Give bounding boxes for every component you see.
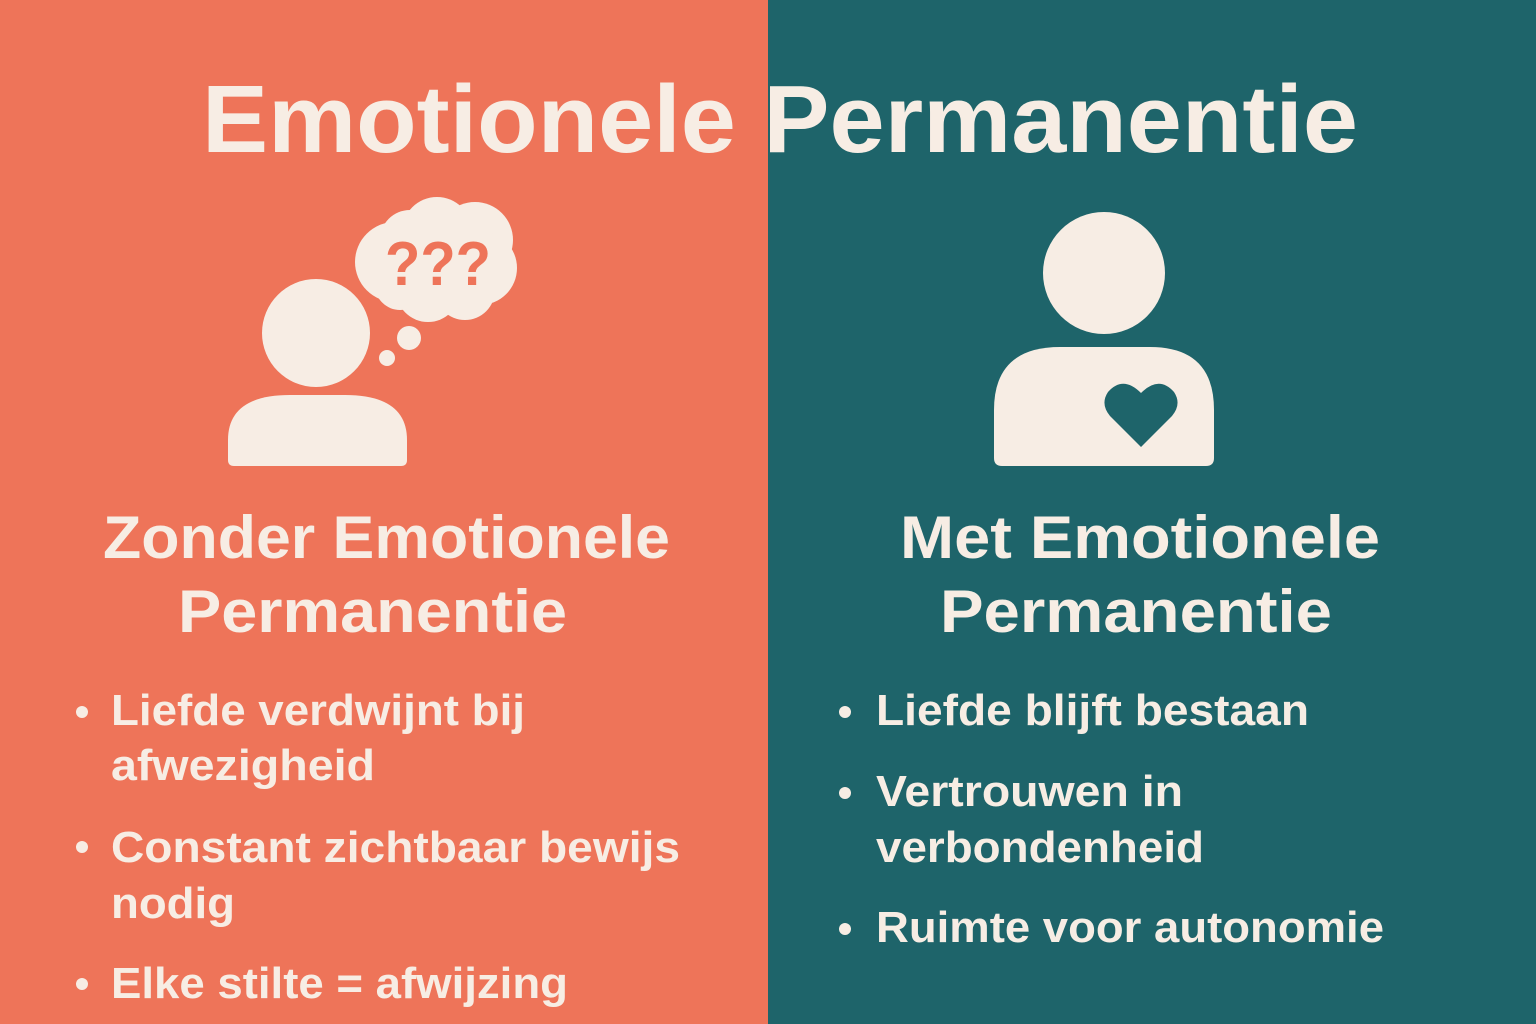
bullet list: left: nodig (111, 879, 235, 928)
panel: right background (768, 0, 1536, 1024)
bullet list: right: Ruimte voor autonomie (876, 903, 1384, 952)
bullet list: right: Vertrouwen in (876, 767, 1183, 816)
title: Emotionele Permanentie (202, 66, 1358, 173)
heading: left: Zonder Emotionele (103, 504, 670, 571)
bullet list: left: afwezigheid (111, 741, 375, 790)
icon: confused person with thought bubble: ??? (385, 230, 491, 299)
bullet list: right (839, 686, 1384, 952)
bullet list: right: verbondenheid (876, 823, 1204, 872)
heading: right: Met Emotionele (900, 504, 1380, 571)
icon: confused person with thought bubble (228, 197, 517, 466)
heading: right (900, 504, 1380, 645)
bullet list: left: Liefde verdwijnt bij (111, 686, 525, 735)
heading: right: Permanentie (940, 578, 1332, 645)
icon: person with heart (994, 212, 1214, 466)
bullet list: left: Constant zichtbaar bewijs (111, 823, 680, 872)
heading: left: Permanentie (178, 578, 567, 645)
panel: left background (0, 0, 768, 1024)
bullet list: left: Elke stilte = afwijzing (111, 959, 568, 1008)
bullet list: left (76, 686, 680, 1008)
heading: left (103, 504, 670, 645)
bullet list: right: Liefde blijft bestaan (876, 686, 1309, 735)
